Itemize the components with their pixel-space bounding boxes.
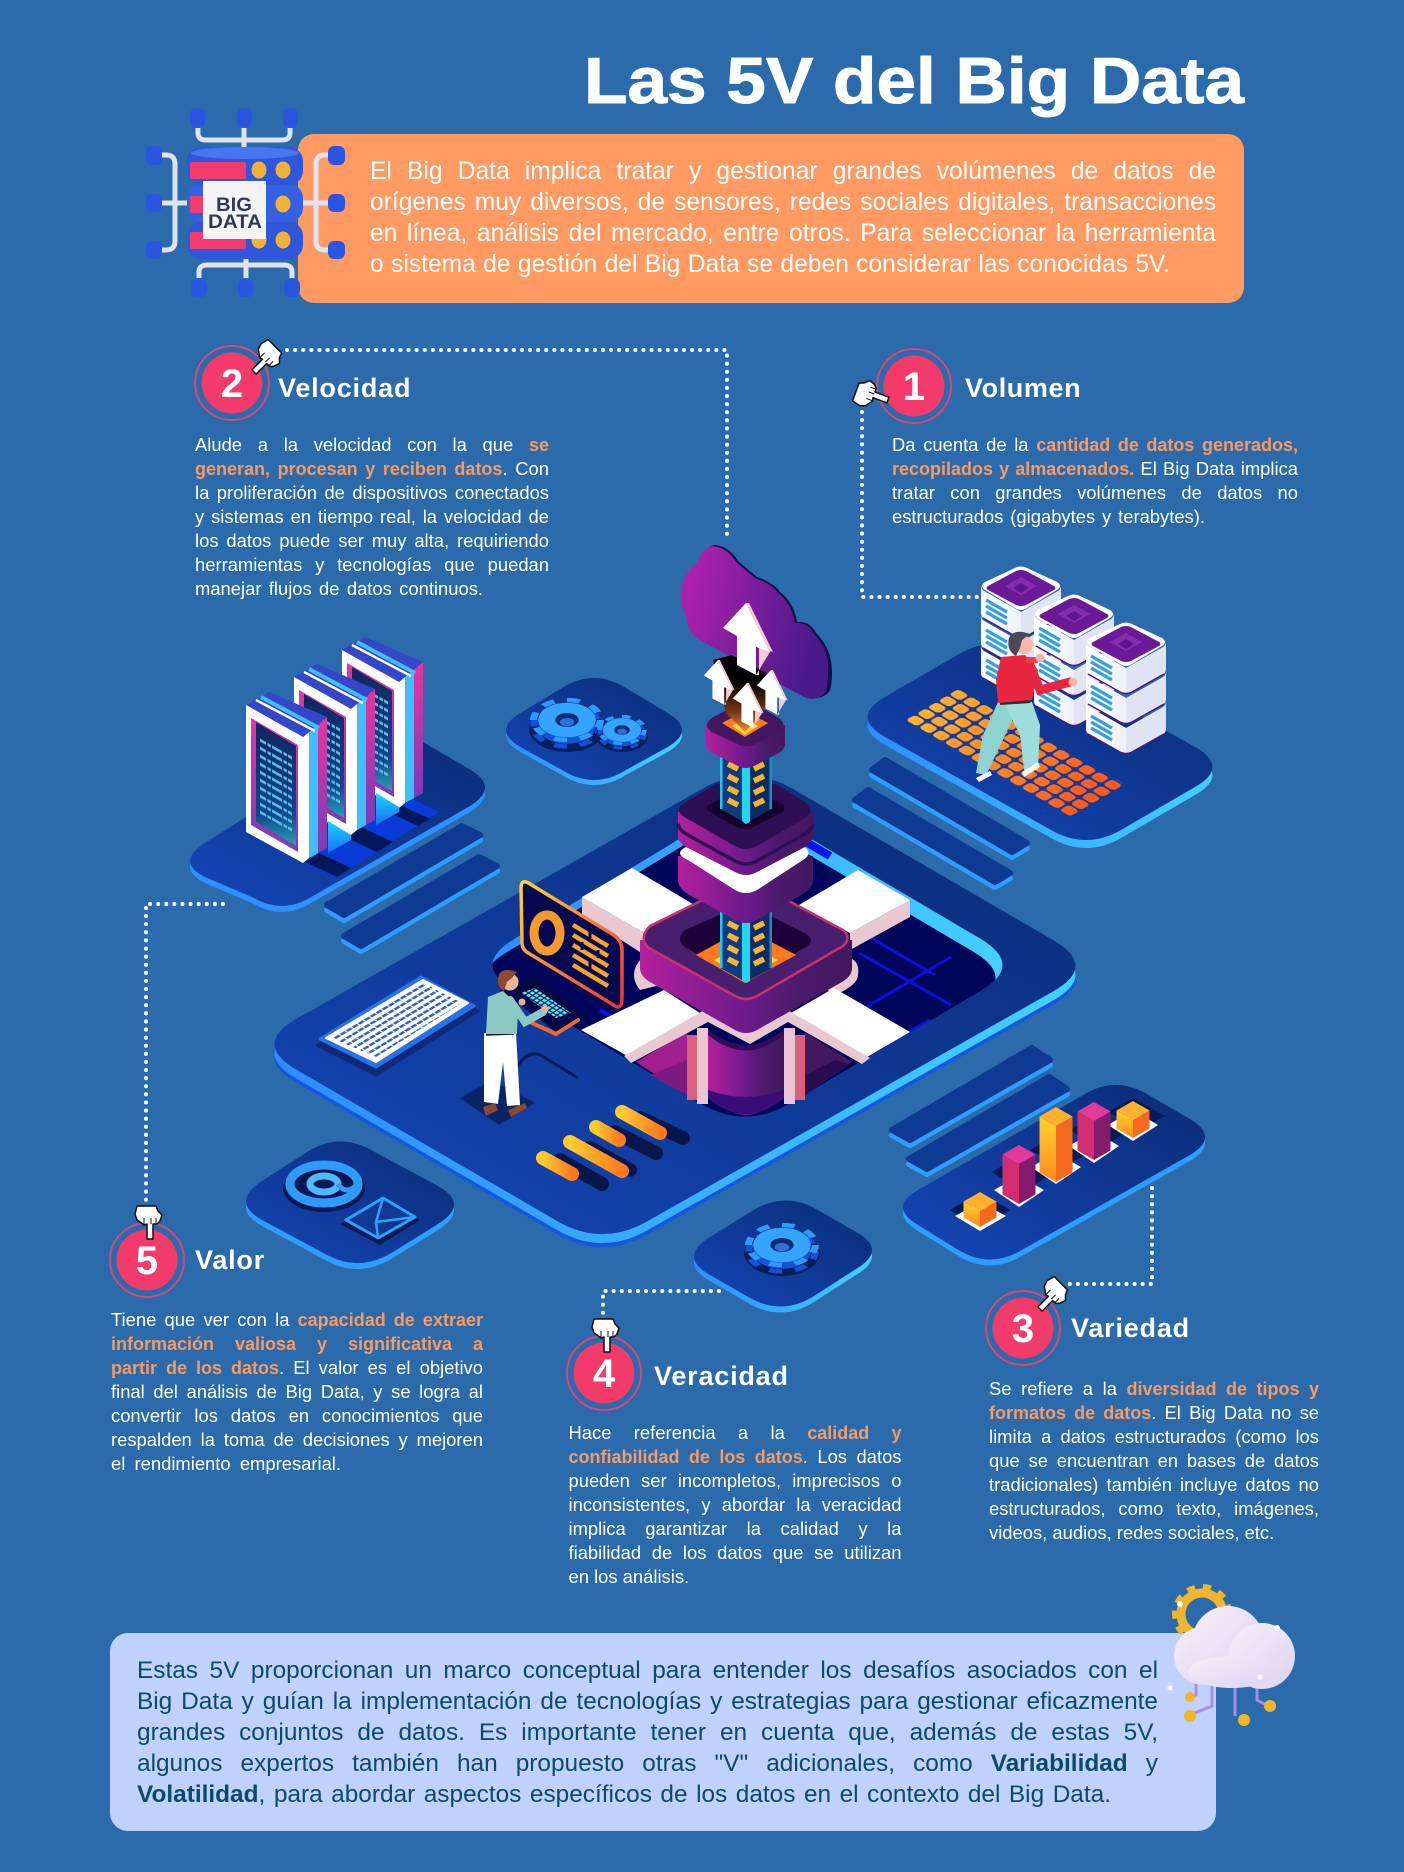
icon: server stacks	[981, 566, 1166, 754]
icon: hand volumen	[852, 377, 892, 414]
icon: hand velocidad	[243, 338, 286, 380]
bar 3	[1040, 1107, 1072, 1182]
bar chart	[950, 1098, 1165, 1231]
closing panel: Volatilidad, para abordar aspectos específicos de los datos en el contexto del Big Data.	[137, 1781, 1111, 1808]
heading: veracidad: Veracidad	[654, 1361, 789, 1391]
text: veracidad: fiabilidad de los datos que se utilizan	[568, 1542, 902, 1563]
text: variedad: que se encuentran en bases de datos	[989, 1450, 1319, 1471]
text: veracidad: inconsistentes, y abordar la veracidad	[568, 1494, 902, 1515]
basin under tower	[624, 1009, 870, 1115]
arrows	[704, 603, 788, 728]
badge 1: 1	[903, 365, 925, 409]
pills	[543, 1112, 683, 1184]
platform: gear	[694, 1200, 872, 1313]
icon: big data database: BIG	[216, 195, 252, 216]
text: velocidad: los datos puede ser muy alta, requiriendo	[195, 530, 549, 551]
text: veracidad: implica garantizar la calidad y la	[568, 1518, 902, 1539]
text: velocidad: generan, procesan y reciben datos. Con	[195, 458, 549, 479]
text: velocidad	[195, 434, 549, 599]
text: valor: el rendimiento empresarial.	[111, 1453, 341, 1474]
text: volumen: recopilados y almacenados. El Big Data implica	[892, 458, 1298, 479]
bars beside servers	[855, 760, 1027, 887]
platform: servers	[868, 566, 1212, 848]
platform: gears	[506, 678, 682, 785]
text: veracidad: confiabilidad de los datos. Los datos	[568, 1446, 902, 1467]
phone	[317, 977, 478, 1075]
closing panel: grandes conjuntos de datos. Es importante tener en cuenta que, además de estas 5V,	[137, 1719, 1158, 1746]
icon: cloud network	[1168, 1587, 1295, 1726]
badge 5	[110, 1223, 184, 1297]
scene: operator at screen	[317, 882, 683, 1184]
text: velocidad: y sistemas en tiempo real, la velocidad de	[195, 506, 549, 527]
text: volumen: Da cuenta de la cantidad de datos generados,	[892, 434, 1298, 455]
text: variedad: formatos de datos. El Big Data no se	[989, 1402, 1319, 1423]
platform: chart	[903, 1085, 1205, 1266]
figure: man in white	[483, 970, 548, 1117]
icon: hand variedad	[1029, 1275, 1072, 1317]
closing panel: algunos expertos también han propuesto otras "V" adicionales, como Variabilidad y	[137, 1750, 1158, 1777]
intro panel: en línea, análisis del mercado, entre otros. Para seleccionar la herramienta	[370, 220, 1216, 247]
intro panel: o sistema de gestión del Big Data se deben considerar las conocidas 5V.	[370, 251, 1170, 278]
text: valor: respalden la toma de decisiones y mejoren	[111, 1429, 483, 1450]
bars beside documents	[327, 826, 497, 951]
text: variedad: videos, audios, redes sociales, etc.	[989, 1522, 1274, 1543]
floor shadow	[460, 1080, 535, 1125]
figure: man in red	[976, 632, 1078, 782]
text: velocidad: Alude a la velocidad con la que se	[195, 434, 549, 455]
platform: email	[246, 1141, 454, 1269]
badge 2: 2	[221, 362, 243, 406]
bar 5	[1116, 1101, 1150, 1138]
intro panel: orígenes muy diversos, de sensores, redes sociales digitales, transacciones	[370, 189, 1216, 216]
closing panel: Estas 5V proporcionan un marco conceptual para entender los desafíos asociados con el	[137, 1657, 1158, 1684]
heading: volumen: Volumen	[965, 373, 1081, 403]
text: volumen: tratar con grandes volúmenes de datos no	[892, 482, 1298, 503]
text: valor: información valiosa y significativa a	[111, 1334, 483, 1354]
text: valor	[111, 1309, 484, 1474]
connector: volumen	[862, 412, 977, 597]
flame	[713, 655, 772, 732]
tower	[640, 545, 852, 1033]
text: veracidad	[568, 1422, 902, 1587]
bar 2	[1002, 1145, 1036, 1204]
text: variedad	[989, 1378, 1319, 1543]
dashboard screen	[521, 882, 622, 1007]
text: valor: Tiene que ver con la capacidad de extraer	[111, 1309, 483, 1330]
text: variedad: Se refiere a la diversidad de tipos y	[989, 1378, 1319, 1399]
badge 3: 3	[1012, 1307, 1034, 1351]
tower base ring	[640, 881, 852, 1033]
icon: gear	[744, 1225, 820, 1276]
icon: hand valor	[135, 1206, 162, 1239]
platform: documents	[190, 637, 485, 912]
text: variedad: tradicionales) también incluye datos no	[989, 1474, 1319, 1495]
icon: at sign	[283, 1164, 365, 1212]
connector: velocidad	[287, 350, 727, 540]
text: valor: partir de los datos. El valor es el objetivo	[111, 1357, 483, 1378]
cloud	[681, 545, 832, 699]
text: veracidad: en los análisis.	[568, 1566, 689, 1587]
text: valor: final del análisis de Big Data, y se logra al	[111, 1381, 483, 1402]
closing panel: Big Data y guían la implementación de tecnologías y estrategias para gestionar eficazmente	[137, 1688, 1158, 1715]
icon: hand veracidad	[592, 1319, 619, 1352]
text: veracidad: Hace referencia a la calidad y	[568, 1422, 902, 1443]
icon: big data database: DATA	[208, 212, 262, 233]
text: volumen: estructurados (gigabytes y terabytes).	[892, 506, 1205, 527]
tower mid stack	[678, 749, 813, 923]
bar 1	[964, 1192, 996, 1227]
connector: variedad	[1069, 1188, 1152, 1284]
console	[500, 976, 584, 1034]
icon: gears	[529, 700, 648, 752]
white cross bars	[581, 868, 910, 1060]
pit	[492, 840, 1002, 1116]
platform: main	[274, 776, 1076, 1247]
heading: variedad: Variedad	[1071, 1313, 1190, 1343]
text: veracidad: pueden ser incompletos, imprecisos o	[568, 1470, 902, 1491]
badge 3	[986, 1291, 1060, 1365]
bars beside chart	[892, 1048, 1067, 1174]
badge 2	[195, 346, 269, 420]
pedestal outline	[515, 1054, 578, 1078]
tower cap	[706, 702, 785, 768]
badge 5: 5	[136, 1239, 158, 1283]
intro panel: El Big Data implica tratar y gestionar grandes volúmenes de datos de	[370, 158, 1216, 185]
badge 4	[567, 1336, 641, 1410]
text: velocidad: la proliferación de dispositivos conectados	[195, 482, 549, 503]
connector: veracidad	[603, 1291, 719, 1319]
text: valor: convertir los datos en conocimientos que	[111, 1405, 483, 1426]
icon: document stacks	[246, 637, 423, 863]
text: velocidad: manejar flujos de datos continuos.	[195, 578, 483, 599]
heading: velocidad: Velocidad	[278, 373, 411, 403]
text: variedad: limita a datos estructurados (como los	[989, 1426, 1319, 1447]
text: variedad: estructurados, como texto, imágenes,	[989, 1498, 1319, 1519]
intro panel	[298, 134, 1244, 303]
icon: keyboard	[904, 688, 1126, 817]
heading: valor: Valor	[195, 1245, 265, 1275]
badge 4: 4	[593, 1352, 616, 1396]
text: velocidad: herramientas y tecnologías que puedan	[195, 554, 549, 575]
icon: envelope	[340, 1198, 420, 1245]
connector: valor	[146, 904, 223, 1206]
title: Las 5V del Big Data	[584, 44, 1245, 117]
icon: big data database	[146, 108, 345, 297]
closing panel	[110, 1633, 1216, 1831]
text: volumen	[892, 434, 1298, 527]
badge 1	[877, 349, 951, 423]
icon: floor stripes	[303, 797, 439, 878]
bar 4	[1078, 1102, 1110, 1160]
